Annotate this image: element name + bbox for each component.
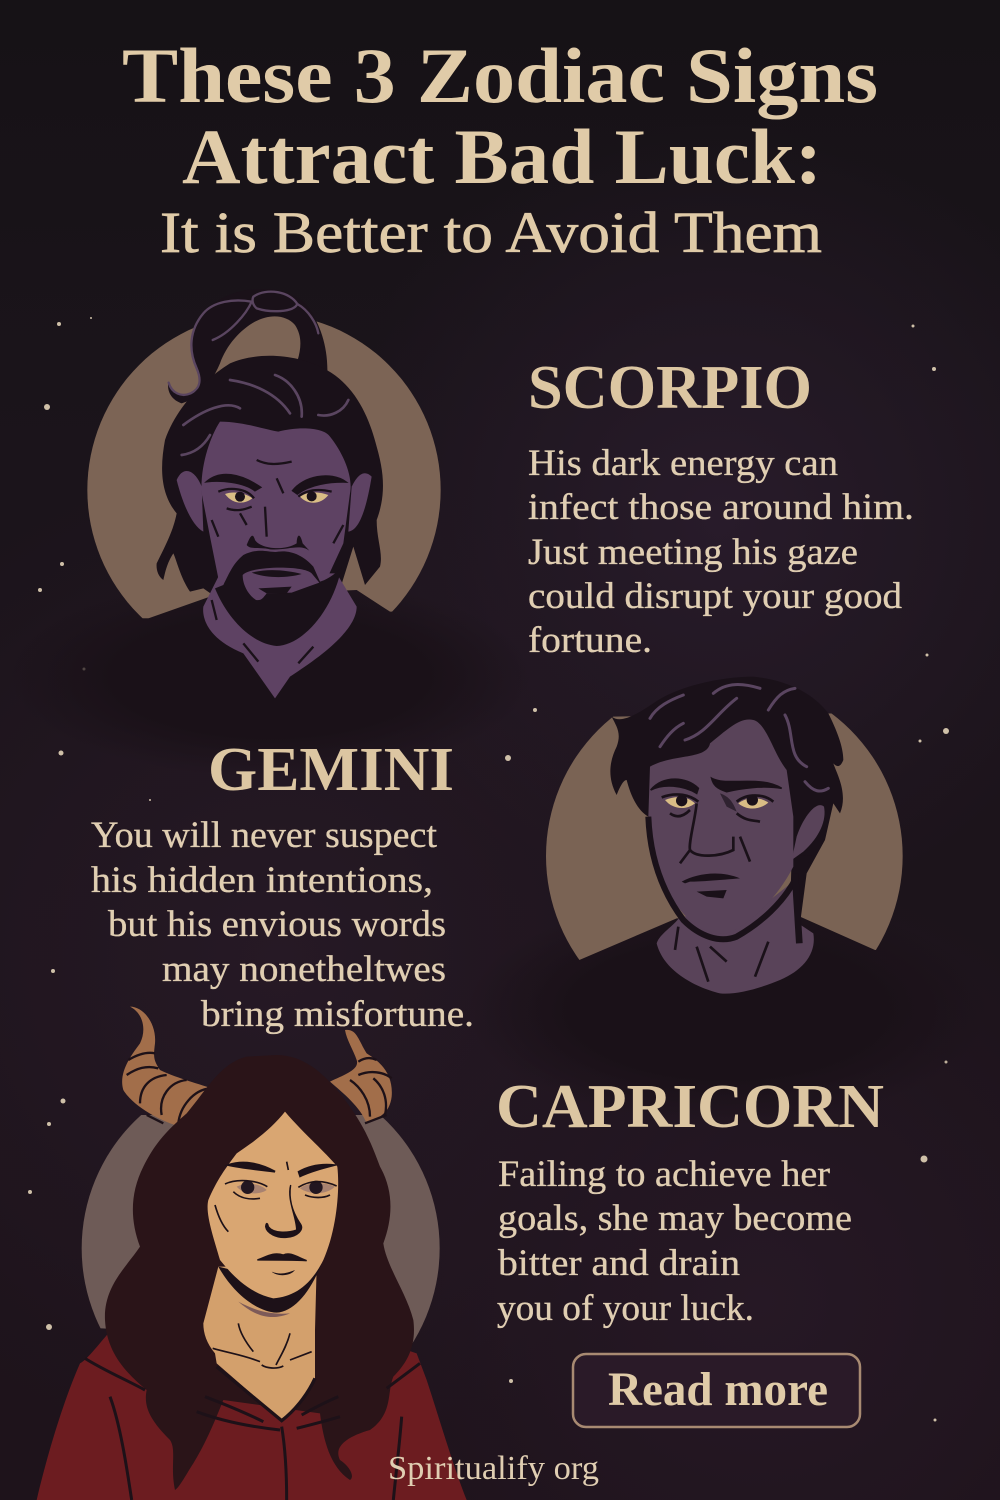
capricorn text: you of your luck. — [497, 1288, 754, 1329]
footer brand: Spiritualify org — [388, 1450, 599, 1487]
title: It is Better to Avoid Them — [160, 200, 822, 265]
portrait: scorpio man — [10, 289, 530, 777]
gemini text: may nonetheltwes — [162, 949, 446, 990]
capricorn text — [497, 1154, 852, 1329]
scorpio text: infect those around him. — [528, 487, 914, 528]
title: These 3 Zodiac Signs — [122, 32, 878, 119]
capricorn text: Failing to achieve her — [498, 1154, 830, 1195]
read more button — [573, 1354, 860, 1427]
capricorn text: bitter and drain — [498, 1243, 740, 1284]
scorpio heading: SCORPIO — [528, 354, 812, 422]
gemini text: but his envious words — [108, 904, 446, 945]
portrait: gemini man — [467, 677, 987, 1123]
scorpio text: His dark energy can — [528, 443, 838, 484]
gemini text: You will never suspect — [91, 815, 438, 856]
scorpio text: Just meeting his gaze — [528, 532, 858, 573]
title — [122, 32, 878, 265]
gemini text: bring misfortune. — [201, 994, 474, 1035]
gemini heading: GEMINI — [208, 736, 454, 804]
portrait: capricorn woman — [37, 1007, 467, 1500]
gemini text — [91, 815, 474, 1035]
gemini text: his hidden intentions, — [91, 860, 433, 901]
scorpio text: fortune. — [528, 620, 652, 661]
background stars — [28, 317, 949, 1422]
scorpio text — [528, 443, 914, 661]
scorpio text: could disrupt your good — [528, 576, 903, 617]
capricorn heading: CAPRICORN — [496, 1073, 884, 1141]
read more button: Read more — [608, 1363, 828, 1416]
capricorn text: goals, she may become — [498, 1198, 852, 1239]
title: Attract Bad Luck: — [182, 113, 822, 200]
